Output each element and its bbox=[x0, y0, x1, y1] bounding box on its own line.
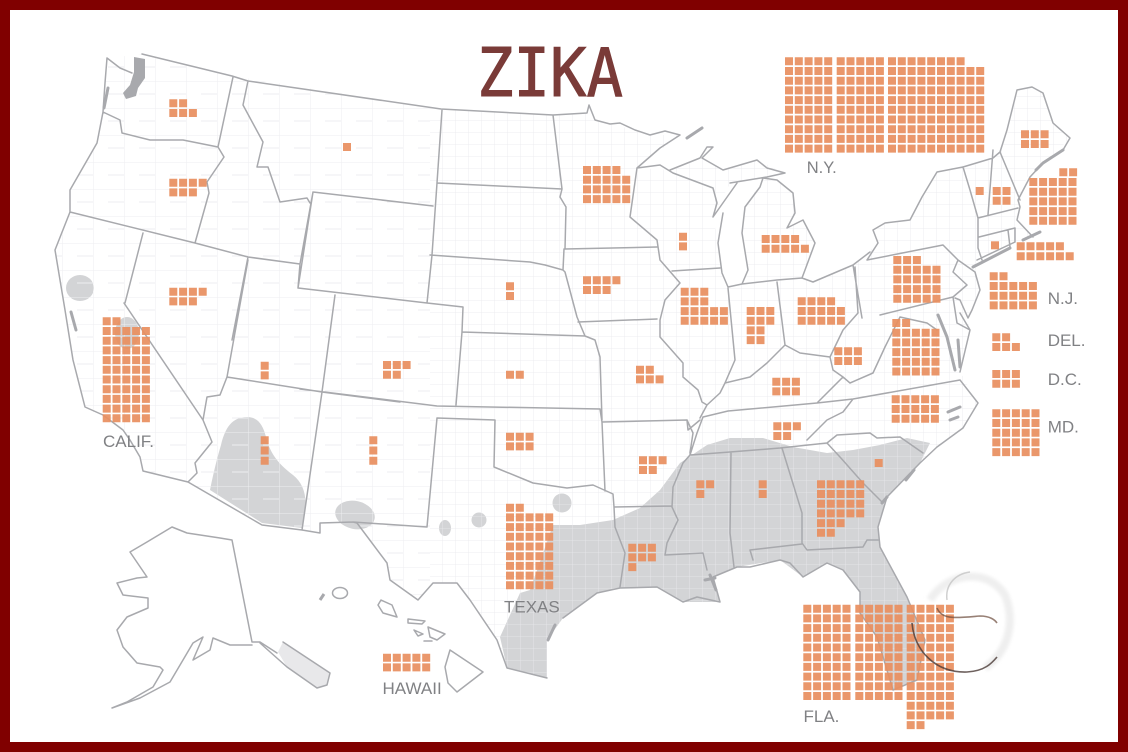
grid: North Carolina bbox=[892, 399, 939, 419]
label: HAWAII: HAWAII bbox=[382, 679, 442, 698]
Niihau bbox=[320, 594, 324, 600]
soft swirl halo bbox=[930, 576, 1010, 668]
grid: West Virginia bbox=[834, 351, 862, 361]
grid: D.C. bbox=[992, 374, 1020, 384]
risk zone: Texas west bbox=[472, 512, 486, 528]
grid: Mississippi bbox=[696, 484, 714, 494]
label: MD.: MD. bbox=[1048, 418, 1079, 437]
grid: Connecticut bbox=[991, 241, 999, 249]
grid: Massachusetts bbox=[1029, 172, 1077, 221]
grid: Illinois bbox=[681, 292, 728, 321]
grid: Georgia bbox=[817, 484, 864, 533]
risk zone: Texas far west bbox=[439, 520, 451, 536]
grid: Alabama bbox=[759, 484, 767, 494]
grid: HAWAII bbox=[383, 658, 430, 667]
upper swirl stroke bbox=[937, 608, 997, 623]
grid: MD. bbox=[992, 413, 1040, 452]
state labels bbox=[103, 159, 1085, 726]
grid: Nevada bbox=[169, 292, 207, 301]
risk zone: New Mexico bbox=[333, 497, 377, 533]
grid: South Carolina bbox=[875, 459, 883, 467]
watermark swirl bbox=[912, 572, 1010, 672]
grid: New Hampshire bbox=[993, 191, 1010, 201]
grid: N.J. bbox=[990, 276, 1037, 305]
grid: Montana bbox=[343, 143, 351, 151]
grid: Nebraska bbox=[506, 286, 514, 296]
risk zone: Arizona bbox=[210, 417, 306, 528]
risk zone: northern California bbox=[66, 275, 94, 301]
label: DEL.: DEL. bbox=[1048, 331, 1085, 350]
grid: Oklahoma bbox=[506, 437, 534, 446]
grid: Minnesota bbox=[583, 170, 630, 199]
label: CALIF.: CALIF. bbox=[103, 432, 154, 451]
grid: Oregon bbox=[169, 183, 207, 192]
grid: CALIF. bbox=[103, 321, 150, 418]
risk zone: central California bbox=[115, 317, 139, 349]
risk zone: Texas north bbox=[552, 494, 572, 512]
grid: Kansas bbox=[506, 371, 524, 379]
grid: Vermont bbox=[976, 187, 984, 195]
grid: New Mexico bbox=[369, 440, 377, 461]
grid: Virginia bbox=[892, 323, 940, 372]
grid: Wisconsin bbox=[679, 237, 687, 246]
grid: Michigan bbox=[762, 239, 809, 249]
grid: Louisiana bbox=[628, 548, 656, 567]
grid: Rhode Island bbox=[1017, 246, 1074, 256]
title: ZIKA bbox=[477, 34, 623, 112]
Alaska panhandle bbox=[278, 642, 330, 688]
grid: Pennsylvania bbox=[893, 260, 940, 299]
coastal waters bbox=[71, 88, 1063, 640]
Kauai bbox=[332, 588, 348, 598]
grid: Arkansas bbox=[639, 460, 667, 470]
grid: Tennessee bbox=[773, 426, 801, 436]
label: N.Y.: N.Y. bbox=[807, 159, 837, 177]
grid: Missouri bbox=[636, 370, 664, 379]
grid: Indiana bbox=[747, 311, 774, 340]
Hawaiian islands bbox=[378, 600, 483, 692]
grid: Iowa bbox=[583, 280, 620, 290]
top swirl curl bbox=[947, 572, 970, 600]
risk zone: southeast bbox=[500, 438, 930, 690]
grid: Maine bbox=[1021, 134, 1049, 144]
label: N.J.: N.J. bbox=[1048, 289, 1078, 308]
Puget Sound bbox=[123, 57, 145, 99]
grid: Kentucky bbox=[772, 382, 800, 391]
label: TEXAS: TEXAS bbox=[504, 598, 560, 617]
grid: FLA. bbox=[803, 609, 954, 725]
case grids by state bbox=[103, 61, 1077, 725]
grid: Colorado bbox=[383, 365, 411, 375]
Alaska bbox=[112, 527, 330, 708]
label: D.C.: D.C. bbox=[1048, 370, 1082, 389]
grid: N.Y. bbox=[785, 61, 984, 149]
state borders bbox=[55, 54, 1070, 690]
grid: Washington bbox=[169, 103, 197, 113]
grid: TEXAS bbox=[506, 508, 553, 585]
grid: Arizona bbox=[261, 440, 269, 461]
grid: DEL. bbox=[992, 337, 1020, 347]
grid: Ohio bbox=[798, 301, 845, 321]
dark swirl arc bbox=[912, 623, 997, 672]
grid: Utah bbox=[261, 366, 269, 375]
label: FLA.: FLA. bbox=[804, 707, 839, 726]
